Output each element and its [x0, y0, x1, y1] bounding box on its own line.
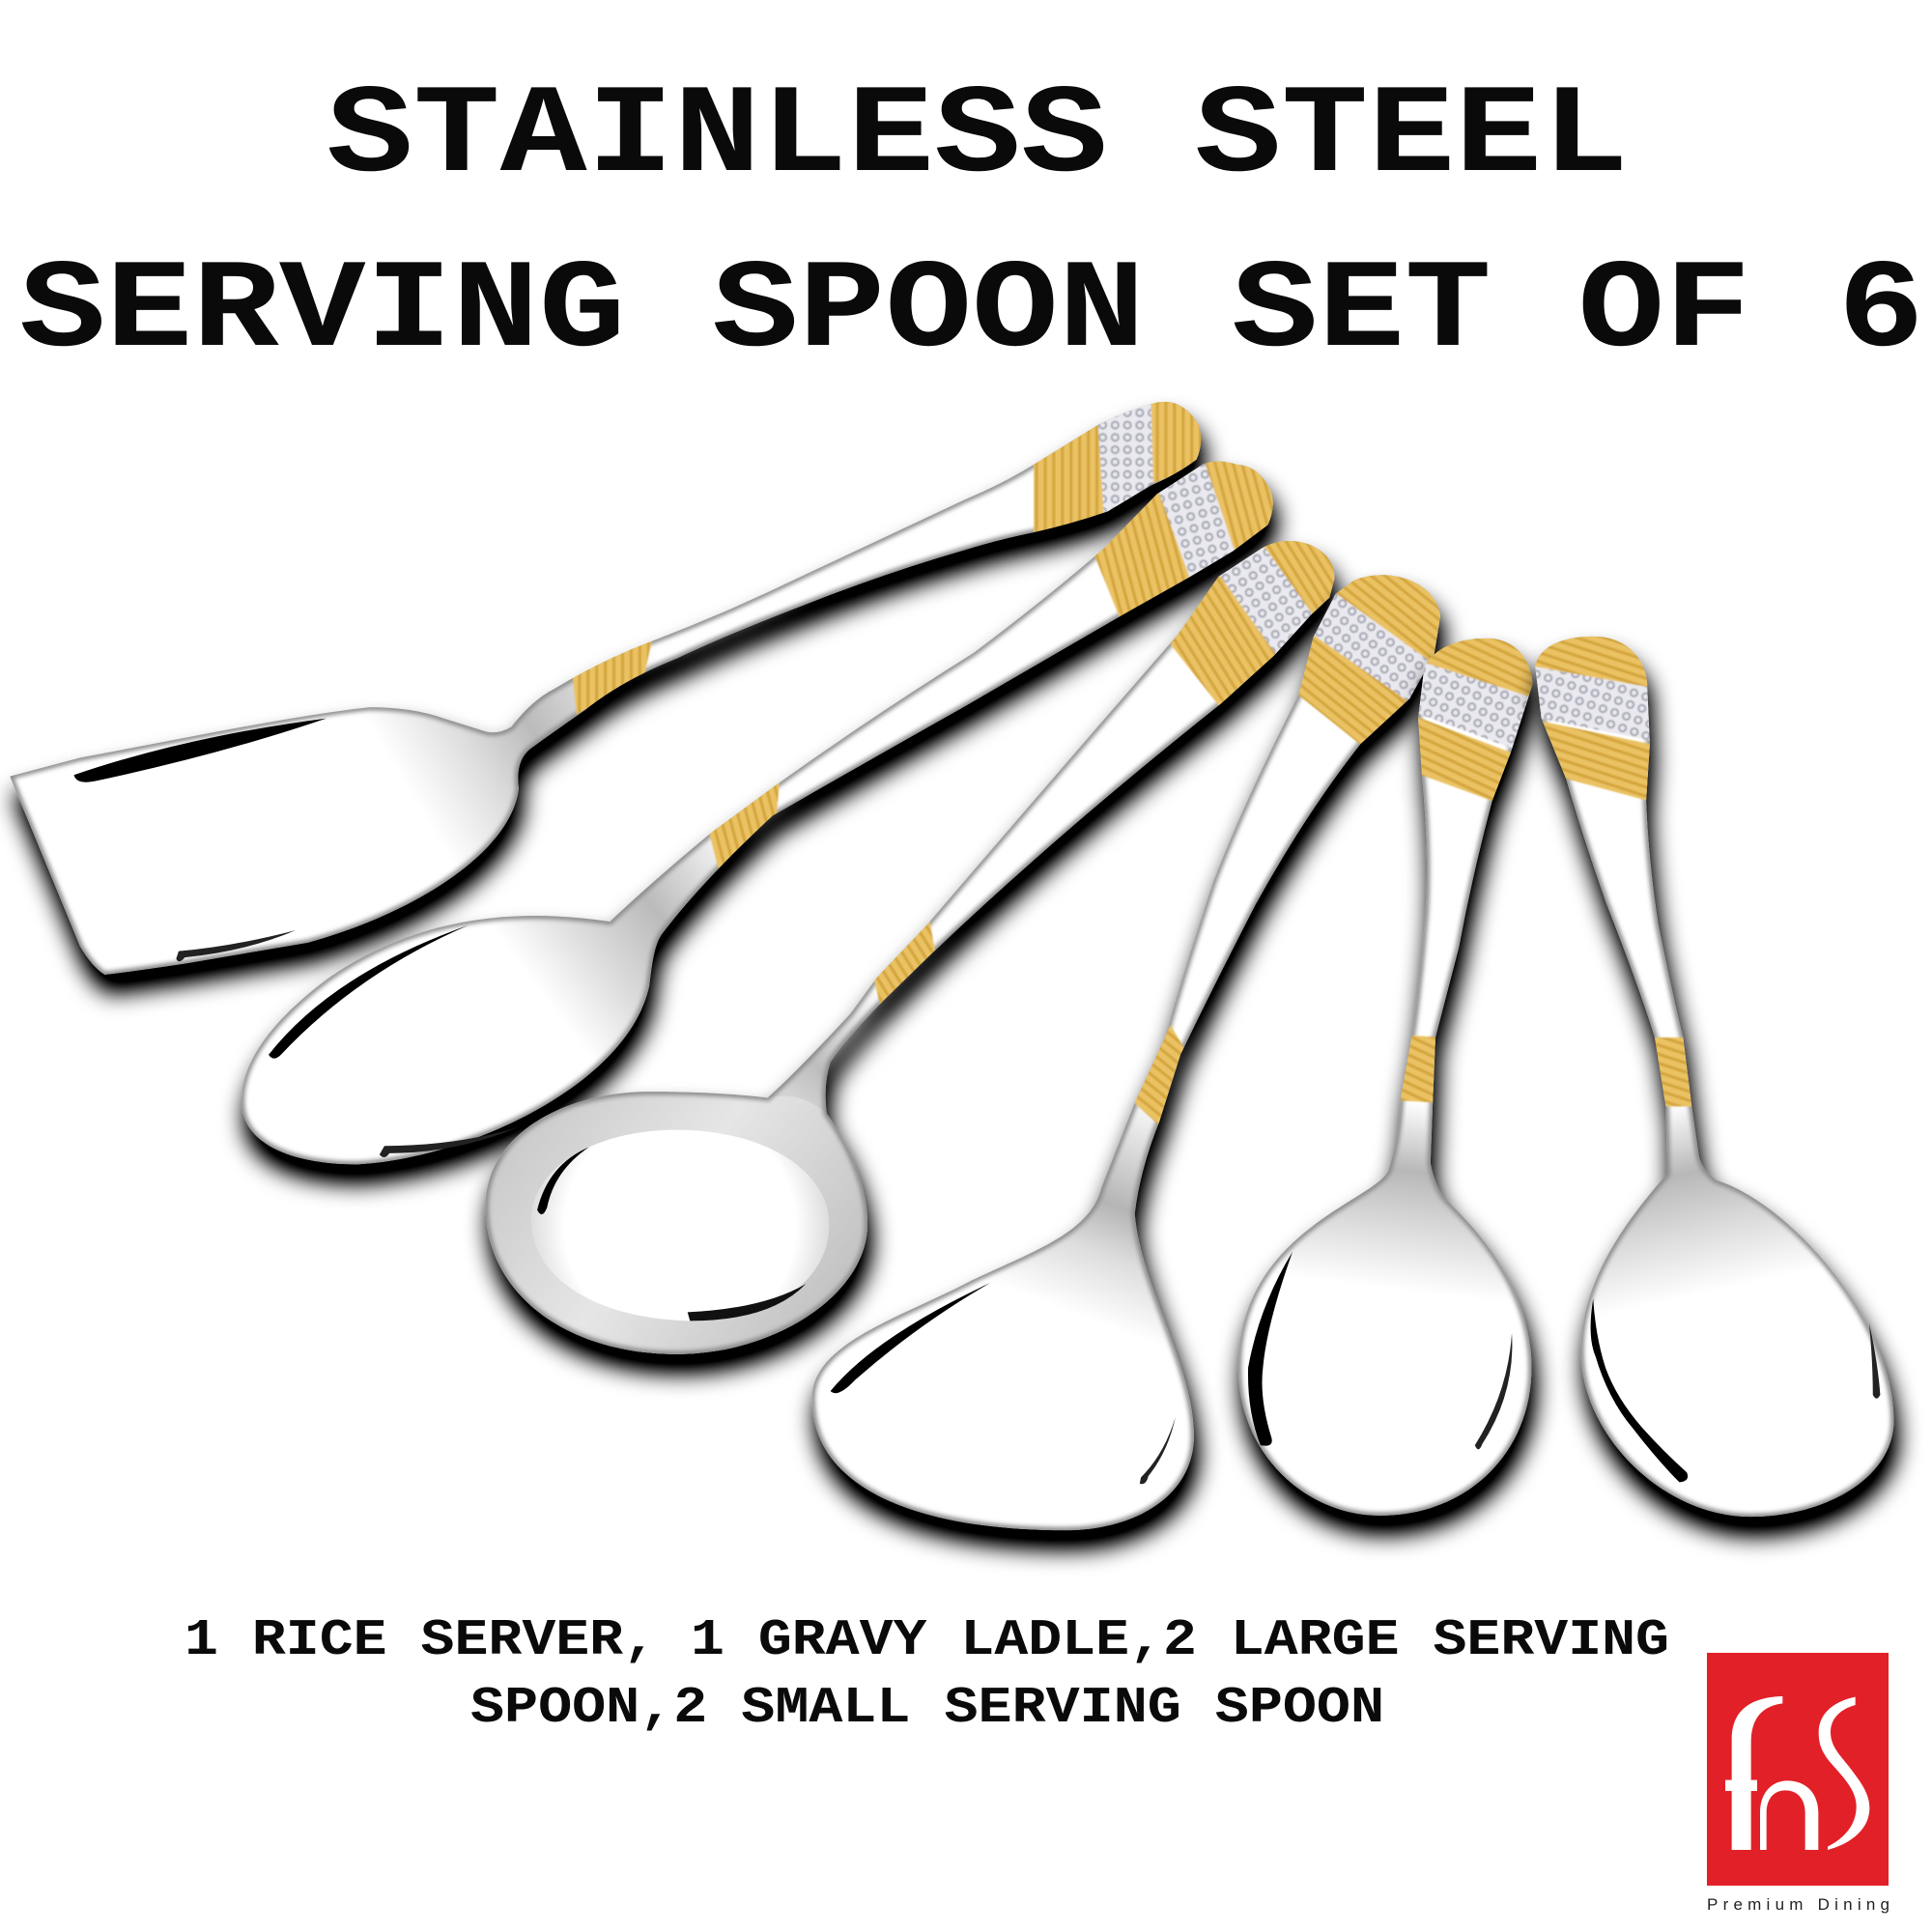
logo tagline: Premium Dining: [1707, 1895, 1889, 1914]
logo red panel: [1707, 1653, 1889, 1886]
spoon: ring ladle: [486, 518, 1350, 1373]
title line 2: SERVING SPOON SET OF 6: [19, 242, 1924, 384]
title: [19, 67, 1924, 384]
description text: [185, 1611, 1669, 1737]
spoon: small serving spoon: [1238, 616, 1547, 1534]
title line 1: STAINLESS STEEL: [327, 67, 1629, 209]
description line 2: SPOON,2 SMALL SERVING SPOON: [470, 1679, 1384, 1737]
logo letters fnS: [1725, 1696, 1869, 1850]
spoon: rice server: [10, 382, 1213, 993]
description line 1: 1 RICE SERVER, 1 GRAVY LADLE,2 LARGE SERVING: [185, 1611, 1669, 1669]
spoon: large serving spoon: [1521, 616, 1897, 1535]
logo: fnS Premium Dining: [1707, 1653, 1889, 1914]
spoon: gravy ladle: [812, 554, 1460, 1548]
spoon: slotted server: [242, 443, 1288, 1182]
product illustration: six serving spoons: [10, 382, 1897, 1548]
